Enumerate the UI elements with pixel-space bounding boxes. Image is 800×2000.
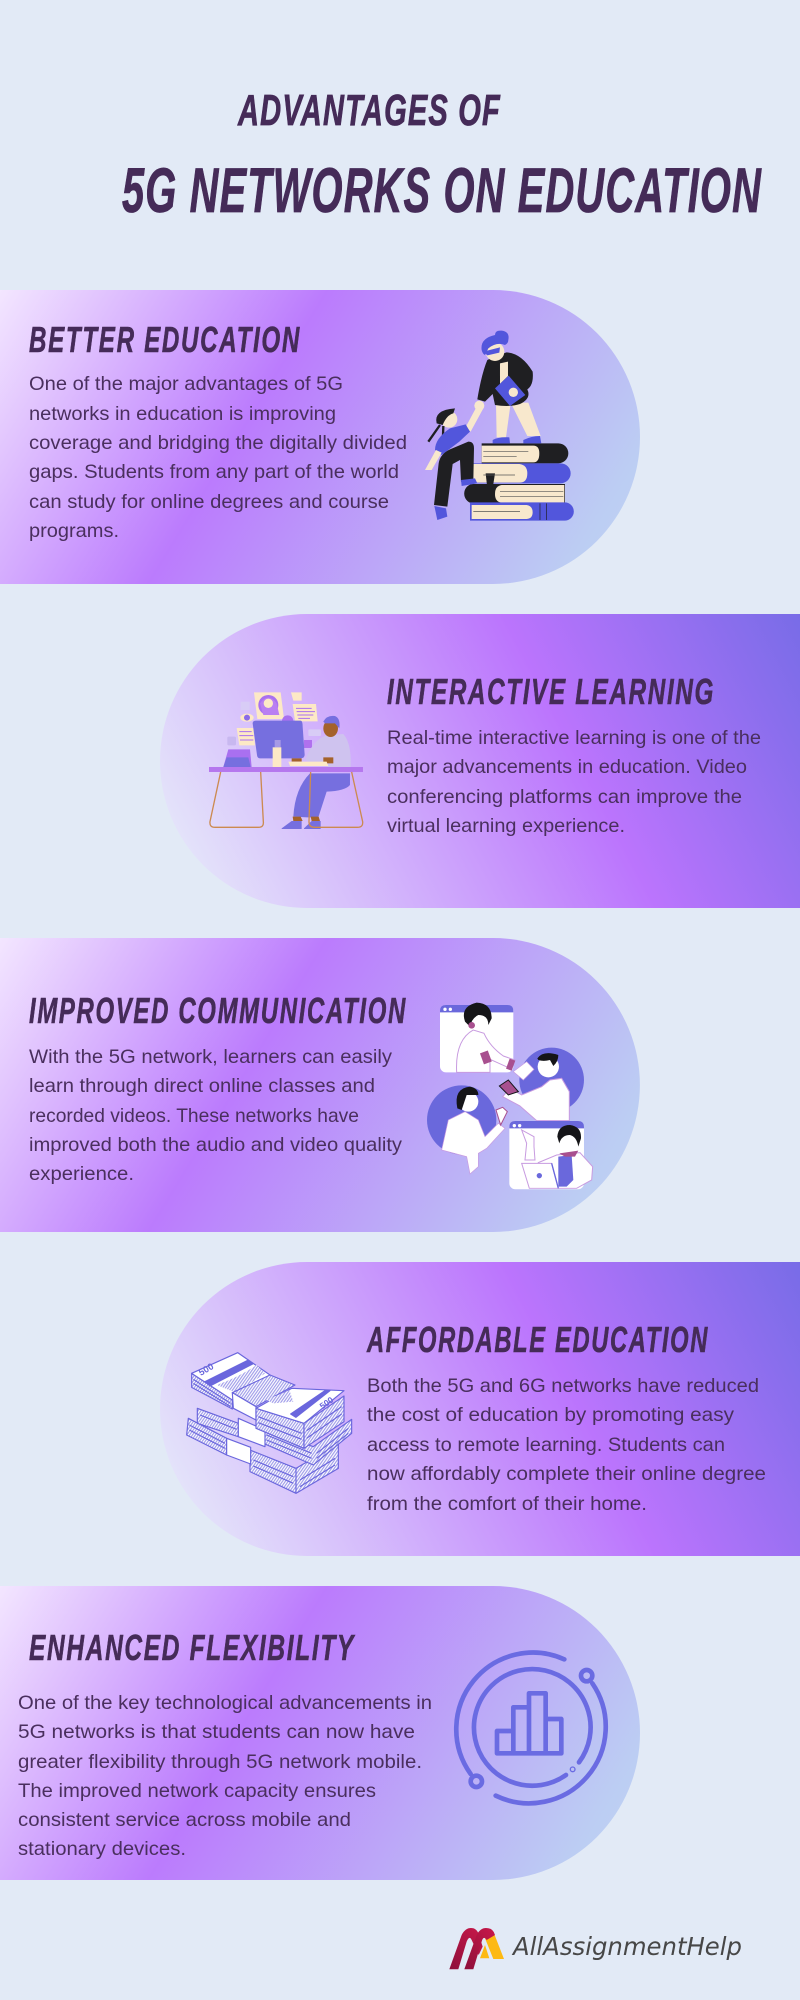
body text: improved communication: recorded videos. These networks have [29, 1105, 359, 1127]
heading: better education: BETTER EDUCATION [29, 319, 301, 360]
upper left bundle [192, 1353, 295, 1420]
body text: affordable education: now affordably complete their online degree [367, 1463, 766, 1485]
body text: enhanced flexibility: greater flexibility through 5G network mobile. [18, 1751, 422, 1773]
illustration: people connecting online [427, 1003, 593, 1189]
illustration: woman helping girl climb books [425, 331, 574, 521]
body text: interactive learning [387, 727, 761, 837]
logo: AllAssignmentHelp: AllAssignmentHelp [511, 1932, 742, 1961]
body text: improved communication: learn through direct online classes and [29, 1075, 375, 1097]
body text: enhanced flexibility: 5G networks is that students can now have [18, 1721, 415, 1743]
heading: improved communication: IMPROVED COMMUNICATION [29, 990, 407, 1031]
body text: better education: networks in education is improving [29, 403, 336, 425]
tablet [223, 749, 252, 767]
body text: better education: One of the major advantages of 5G [29, 373, 343, 395]
panel: affordable education [160, 1262, 800, 1556]
body text: interactive learning: major advancements in education. Video [387, 756, 747, 778]
body text: interactive learning: virtual learning experience. [387, 815, 625, 837]
body text: enhanced flexibility: One of the key technological advancements in [18, 1692, 432, 1714]
body text: better education: programs. [29, 520, 119, 542]
upper right bundle [256, 1388, 344, 1448]
body text: improved communication: With the 5G network, learners can easily [29, 1046, 392, 1068]
illustration: student at desk with computer [209, 692, 363, 829]
body text: enhanced flexibility: consistent service across mobile and [18, 1809, 351, 1831]
illustration: stacks of banknotes [187, 1353, 352, 1493]
body text: affordable education: access to remote learning. Students can [367, 1434, 725, 1456]
person [282, 716, 351, 829]
body text: interactive learning: Real-time interactive learning is one of the [387, 727, 761, 749]
right circle with man [499, 1048, 584, 1121]
desk [209, 767, 363, 827]
body text: improved communication: experience. [29, 1163, 134, 1185]
panel: improved communication [0, 938, 640, 1232]
body text: affordable education: Both the 5G and 6G networks have reduced [367, 1375, 759, 1397]
body text: affordable education [367, 1375, 766, 1515]
floating learning cards [227, 692, 321, 748]
top left video window [440, 1003, 515, 1072]
computer monitor [253, 721, 305, 758]
girl [425, 407, 483, 520]
body text: enhanced flexibility: stationary devices. [18, 1838, 186, 1860]
panel: better education [0, 290, 640, 584]
lower bundle [187, 1408, 352, 1493]
bottle [273, 740, 281, 767]
body text: enhanced flexibility: The improved network capacity ensures [18, 1780, 376, 1802]
logo: AllAssignmentHelp [449, 1928, 742, 1969]
body text: improved communication: improved both the audio and video quality [29, 1134, 402, 1156]
title: ADVANTAGES OF [237, 86, 501, 135]
panel: interactive learning [160, 614, 800, 908]
upper right bundle: 500 [318, 1395, 335, 1411]
title [122, 86, 762, 226]
body text: enhanced flexibility [18, 1692, 432, 1860]
body text: better education [29, 373, 407, 542]
body text: affordable education: from the comfort of their home. [367, 1493, 647, 1515]
body text: better education: gaps. Students from any part of the world [29, 461, 399, 483]
body text: interactive learning: conferencing platforms can improve the [387, 786, 742, 808]
left circle with man [427, 1085, 507, 1174]
icon: bar chart in circular rings [456, 1653, 606, 1803]
upper left bundle: 500 [197, 1361, 215, 1378]
body text: improved communication [29, 1046, 402, 1185]
woman [474, 331, 541, 443]
panel: enhanced flexibility [0, 1586, 640, 1880]
logo mark [449, 1928, 504, 1969]
bottom right video window [509, 1121, 593, 1189]
heading: enhanced flexibility: ENHANCED FLEXIBILITY [29, 1627, 355, 1668]
body text: better education: coverage and bridging the digitally divided [29, 432, 407, 454]
icon: stack of books [464, 443, 574, 521]
body text: affordable education: the cost of education by promoting easy [367, 1404, 734, 1426]
body text: better education: can study for online degrees and course [29, 491, 389, 513]
